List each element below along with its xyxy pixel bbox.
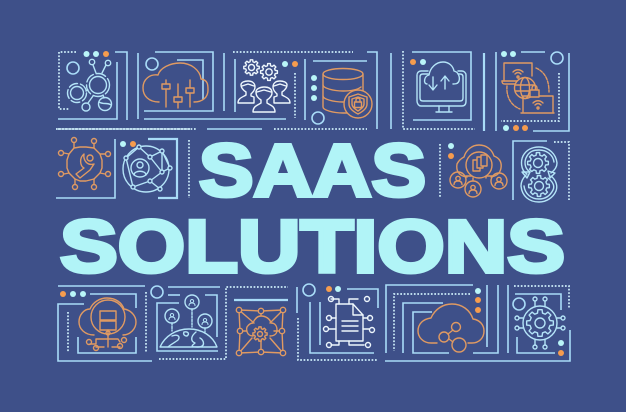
dotted divider bottom of top row <box>58 128 367 130</box>
panel: wrench gear network icon <box>56 129 190 198</box>
panel: global users icon <box>151 286 288 359</box>
panel: monitor cloud icon <box>403 51 484 131</box>
panel: sync gears icon <box>513 141 569 202</box>
panel: team gears icon <box>238 60 298 118</box>
panel: document circuit icon <box>297 284 378 360</box>
thick line above network icon <box>234 299 288 301</box>
panel: secure database icon <box>305 52 377 129</box>
panel: global laptops icon <box>496 51 569 131</box>
panel: cloud server icon <box>58 286 152 361</box>
title: SAAS: SAAS <box>199 129 426 212</box>
panel: user network globe icon <box>120 139 189 198</box>
panel: cloud sliders icon <box>143 52 286 119</box>
panel: molecule icon <box>58 51 127 120</box>
panel: gear circuit icon <box>385 285 570 361</box>
panel: cloud documents users icon <box>440 143 507 197</box>
title: SOLUTIONS: SOLUTIONS <box>60 205 565 288</box>
panel: cloud share icon <box>386 285 498 353</box>
divider line <box>137 53 139 119</box>
dotted frame top <box>233 51 353 53</box>
panel: cloud network gear icon <box>236 307 286 356</box>
